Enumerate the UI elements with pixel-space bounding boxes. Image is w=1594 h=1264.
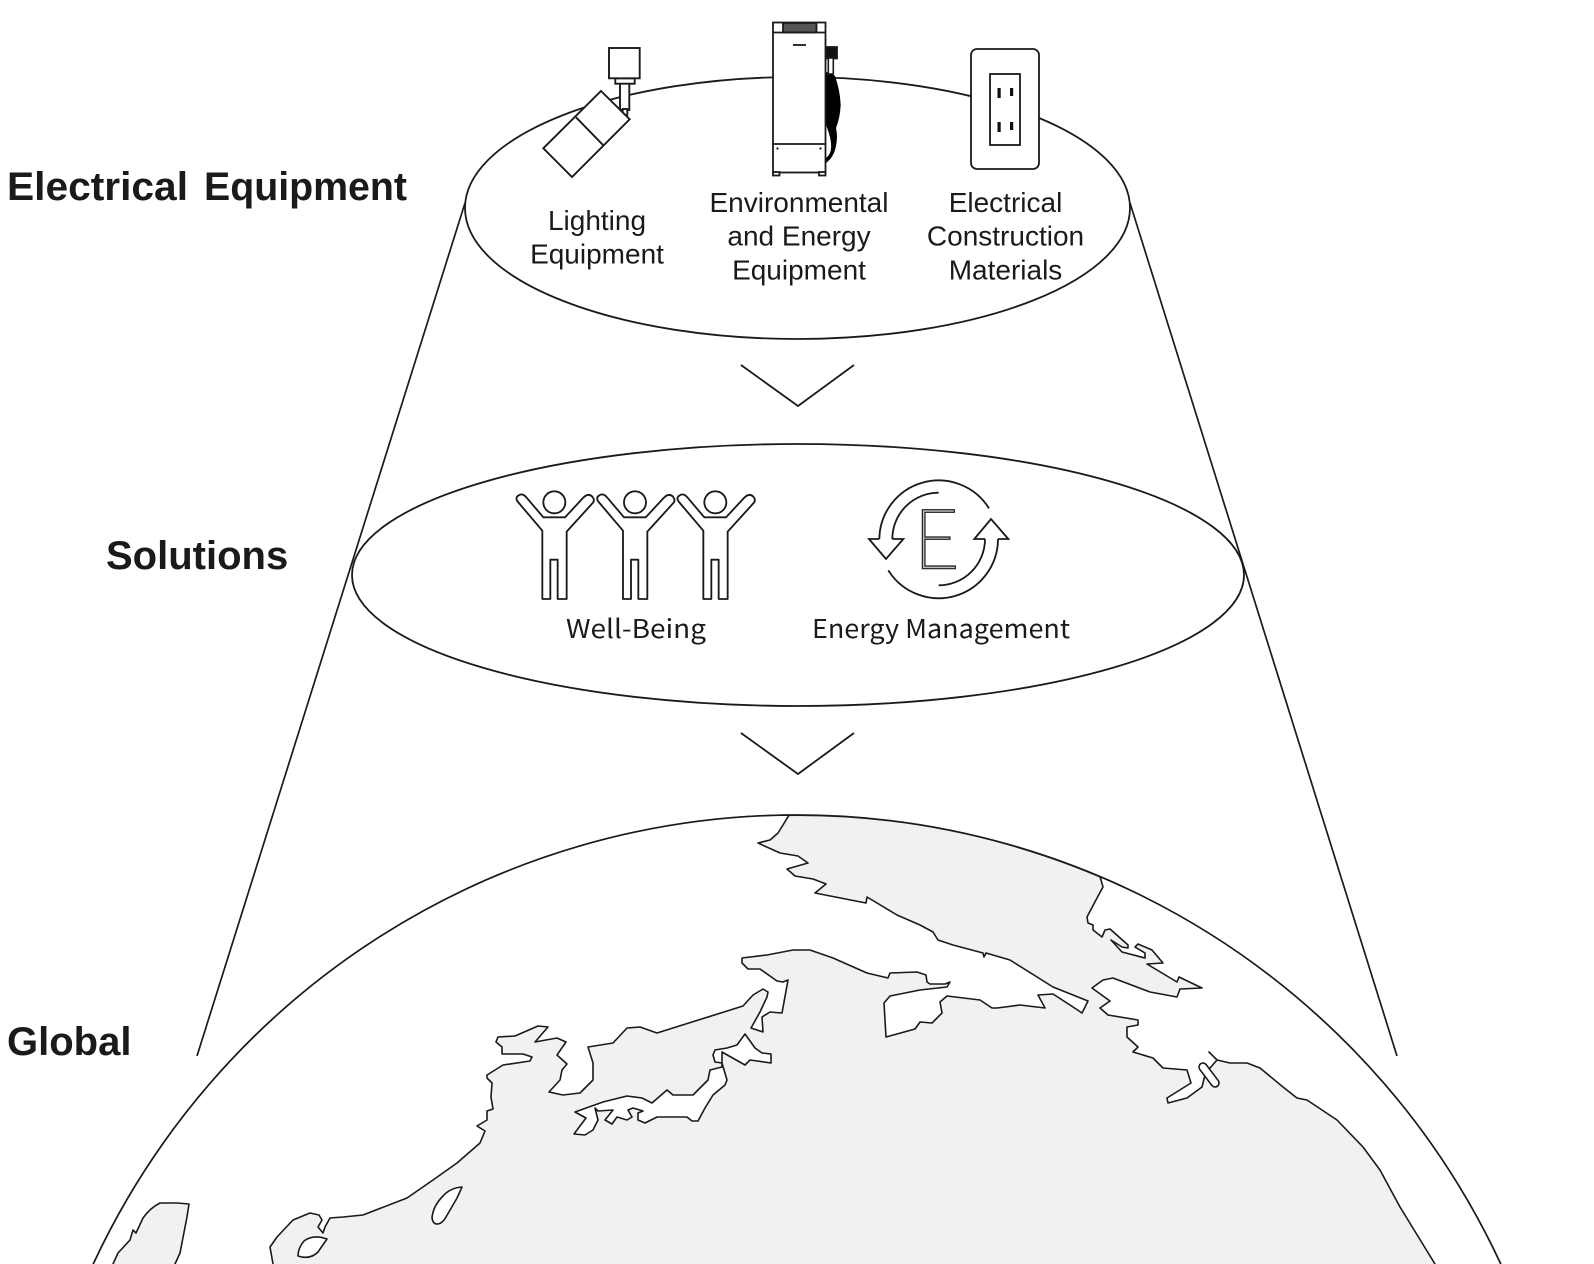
- heading: electrical equipment: Equipment: [204, 165, 407, 209]
- label: electrical construction materials: Electrical: [949, 187, 1062, 218]
- icon: three people with raised arms: [516, 491, 755, 599]
- heading: solutions: Solutions: [106, 534, 288, 578]
- globe disc: [93, 815, 1501, 1264]
- sea: east: [1087, 877, 1501, 1264]
- label: environmental and energy equipment: and Energy: [727, 220, 871, 252]
- icon: energy management cycle: [869, 480, 1008, 598]
- funnel side lines: [197, 203, 1397, 1056]
- icon: electrical outlet: [971, 49, 1039, 169]
- island: capsule: [1197, 1061, 1221, 1089]
- label: electrical construction materials: Construction: [927, 220, 1084, 252]
- top ellipse: electrical equipment: [465, 77, 1130, 339]
- island: round: [298, 1237, 327, 1257]
- label: environmental and energy equipment: Environmental: [710, 187, 888, 218]
- arrow: equipment to solutions: [741, 365, 854, 406]
- arrow: solutions to global: [741, 733, 854, 774]
- strait mark: [1209, 1052, 1217, 1060]
- label: lighting equipment: Equipment: [530, 238, 664, 270]
- island: long: [432, 1187, 462, 1224]
- sea: inland shape: [574, 1034, 771, 1135]
- middle ellipse: solutions: [352, 444, 1244, 706]
- heading: global: Global: [7, 1020, 131, 1064]
- globe with land and seas: [93, 815, 1501, 1264]
- label: environmental and energy equipment: Equipment: [732, 254, 866, 286]
- label: well-being: Well-Being: [566, 609, 706, 646]
- land: far west: [113, 1203, 189, 1264]
- sea: north and west: [93, 815, 1088, 1264]
- heading: electrical equipment: [7, 165, 407, 209]
- label: energy management: Energy Management: [812, 609, 1070, 646]
- label: lighting equipment: Lighting: [548, 205, 646, 236]
- heading: electrical equipment: Electrical: [7, 165, 188, 209]
- icon: lighting equipment: [543, 48, 640, 177]
- icon: environmental and energy equipment: [773, 22, 841, 176]
- label: electrical construction materials: Materials: [949, 254, 1062, 286]
